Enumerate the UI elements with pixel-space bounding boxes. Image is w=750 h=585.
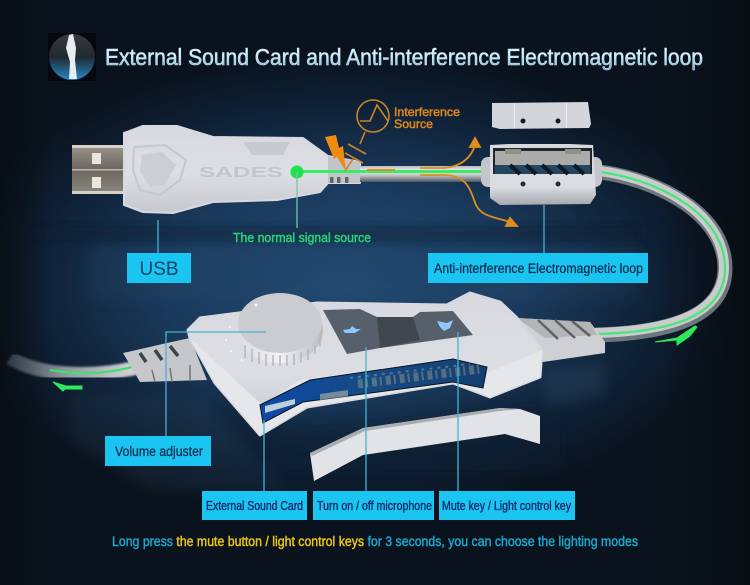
metal connector <box>72 145 125 194</box>
controller strain relief: right <box>517 318 605 362</box>
label: microphone switch: Turn on / off microphone <box>317 499 432 513</box>
interference source <box>325 100 460 171</box>
title: External Sound Card and Anti-interference Electromagnetic loop <box>105 44 703 70</box>
label: normal signal source: The normal signal source <box>233 230 371 245</box>
volume knob <box>237 293 323 366</box>
cable: usb to ferrite <box>360 166 485 182</box>
USB plug <box>72 126 360 213</box>
green signal line <box>290 166 484 178</box>
interference symbol <box>345 100 389 171</box>
leader lines <box>158 172 544 491</box>
label: volume adjuster: Volume adjuster <box>115 444 203 459</box>
ferrite cover <box>492 102 591 129</box>
label: volume adjuster <box>105 436 211 466</box>
label: external sound card <box>202 491 307 520</box>
controller cover strip <box>310 408 540 481</box>
usb symbol recess <box>243 142 290 155</box>
icon: cable emblem <box>48 33 96 81</box>
icon: lightning bolt <box>325 135 346 171</box>
label: external sound card: External Sound Card <box>206 499 303 513</box>
sades logo shield <box>133 145 186 195</box>
label: anti-interference loop: Anti-interference Electromagnetic loop <box>434 261 643 276</box>
controller strain relief: left <box>123 338 207 382</box>
icon: microphone light <box>343 326 361 333</box>
led dots <box>225 326 243 361</box>
interference label: Interference <box>394 105 460 119</box>
icon: mute light <box>437 320 453 331</box>
cable: left exit <box>10 358 135 374</box>
arrow: right green <box>655 326 697 345</box>
interference arrows <box>367 138 517 226</box>
interference source: Source <box>394 117 433 131</box>
controller body <box>188 293 542 435</box>
label: mute and light key: Mute key / Light control key <box>442 499 572 513</box>
ferrite core loop <box>481 144 602 205</box>
footer note: Long press the mute button / light control keys for 3 seconds, you can choose the lighting modes <box>112 534 638 549</box>
label: USB <box>127 253 191 283</box>
label: USB: USB <box>140 259 178 280</box>
pcb window <box>260 359 487 423</box>
arrow: left green <box>53 382 82 391</box>
usb housing <box>124 126 360 213</box>
label: microphone switch <box>313 491 434 520</box>
cable: ferrite to controller <box>595 171 725 335</box>
label: mute and light key <box>439 491 575 520</box>
sades wordmark: SADES <box>199 164 283 181</box>
label: anti-interference loop <box>428 253 648 283</box>
button panel <box>323 309 473 354</box>
